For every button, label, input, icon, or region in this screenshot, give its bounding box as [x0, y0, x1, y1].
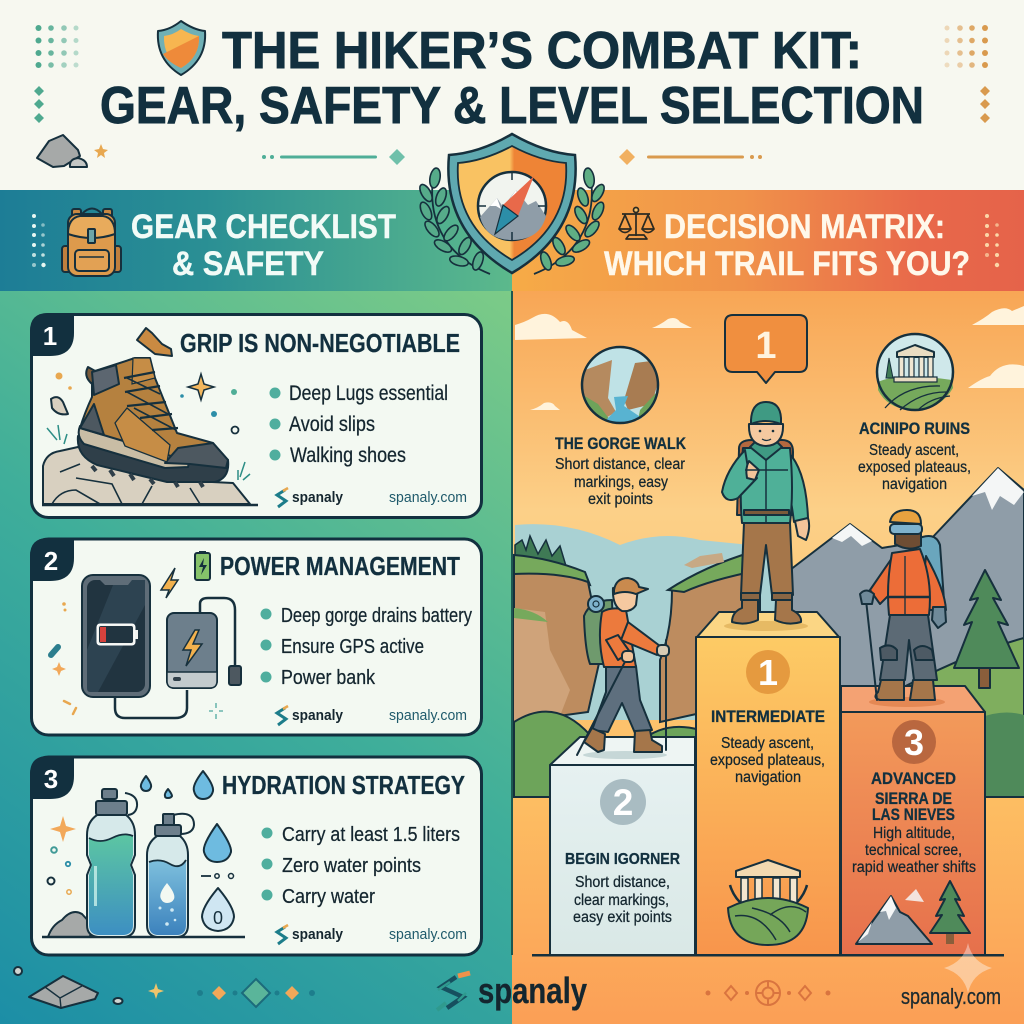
podium block: intermediate: navigation — [735, 769, 801, 786]
text: the gorge walk: THE GORGE WALK — [555, 435, 686, 453]
icon: backpack — [62, 208, 121, 276]
card 2: power — [30, 538, 482, 735]
podium block: intermediate: INTERMEDIATE — [711, 707, 825, 726]
illustration: intermediate hiker — [722, 402, 809, 631]
sparkle — [944, 943, 992, 993]
callout: rank 1 speech bubble — [725, 315, 807, 383]
podium block: intermediate: exposed plateaus, — [710, 752, 825, 769]
illustration: hiking boot on rock — [42, 358, 258, 505]
logo row: card 3 — [277, 925, 467, 944]
badge 3 — [30, 756, 74, 799]
badge 1 — [30, 313, 74, 356]
bullet list: grip — [270, 382, 448, 467]
text: the gorge walk: exit points — [588, 491, 653, 508]
badge 1: 1 — [43, 321, 57, 351]
icon: ruins medallion — [877, 334, 953, 410]
text: acinipo ruins — [858, 420, 971, 493]
bullet list: hydration: Carry at least 1.5 liters — [282, 824, 460, 846]
badge 3: 3 — [44, 764, 58, 794]
title: GEAR, SAFETY & LEVEL SELECTION — [100, 77, 924, 135]
landscape behind the podium — [514, 468, 1024, 797]
podium block: advanced: High altitude, — [873, 825, 955, 842]
podium block: advanced: 3 — [904, 722, 924, 763]
logo row: card 3: spanaly — [292, 926, 344, 943]
header background — [0, 0, 1024, 191]
text: the gorge walk: markings, easy — [574, 474, 668, 491]
text: acinipo ruins: navigation — [882, 476, 947, 493]
banner: decision matrix — [512, 190, 1024, 291]
footer logo: spanaly — [478, 970, 587, 1011]
card 3: hydration: HYDRATION STRATEGY — [222, 770, 465, 800]
podium block: advanced: LAS NIEVES — [872, 805, 955, 824]
emblem: central shield and wreaths — [417, 134, 607, 274]
pine tree — [954, 570, 1019, 688]
logo row: card 3: spanaly.com — [389, 926, 467, 943]
podium block: beginner: Short distance, — [575, 874, 670, 891]
footer left: ornament — [197, 979, 315, 1007]
logo row: card 2: spanaly — [292, 707, 344, 724]
banner: gear checklist — [0, 190, 512, 291]
podium block: beginner: easy exit points — [573, 909, 672, 926]
text: acinipo ruins: Steady ascent, — [869, 442, 959, 459]
icon: title shield — [158, 21, 205, 75]
footer url: spanaly.com — [901, 984, 1001, 1009]
decorative dots: left banner — [32, 214, 46, 267]
text: the gorge walk — [555, 435, 686, 508]
icon: header rock and star — [37, 135, 108, 167]
icon: small shoe — [137, 328, 172, 356]
podium block: advanced: technical scree, — [865, 842, 962, 859]
title: THE HIKER’S COMBAT KIT: — [222, 22, 862, 80]
bullet list: hydration: Zero water points — [282, 855, 421, 877]
bullet list: grip: Deep Lugs essential — [289, 382, 448, 405]
podium block: beginner — [550, 737, 695, 955]
footer left: rock and pebbles — [14, 967, 164, 1008]
text: acinipo ruins: ACINIPO RUINS — [859, 420, 970, 438]
icon: gorge medallion — [582, 347, 658, 424]
divider: right — [619, 149, 762, 165]
card 2: power: POWER MANAGEMENT — [220, 551, 460, 581]
decorative dots: right banner — [985, 214, 999, 267]
banner: gear checklist: & SAFETY — [172, 245, 324, 283]
podium block: beginner: clear markings, — [574, 892, 669, 909]
footer right: ornament — [706, 981, 830, 1005]
banner: decision matrix: WHICH TRAIL FITS YOU? — [604, 245, 970, 283]
podium block: intermediate: 1 — [758, 652, 778, 693]
bullet list: grip: Walking shoes — [290, 444, 406, 467]
bullet list: grip: Avoid slips — [289, 413, 375, 436]
callout: rank 1 speech bubble: 1 — [755, 325, 777, 367]
illustration: water bottles — [42, 776, 245, 937]
icon: title water drop — [194, 771, 213, 799]
illustration: water bottles: 0 — [213, 908, 223, 928]
text: acinipo ruins: exposed plateaus, — [858, 459, 971, 476]
logo row: card 1: spanaly — [292, 489, 344, 506]
icon: scales — [619, 208, 654, 239]
bullet list: hydration — [262, 824, 460, 908]
podium block: beginner: 2 — [613, 782, 633, 823]
podium block: advanced: ADVANCED — [871, 769, 956, 788]
podium block: intermediate: Steady ascent, — [721, 735, 814, 752]
icon: green battery — [195, 551, 210, 580]
decorative dot grid: top left — [34, 25, 78, 123]
banner: gear checklist: GEAR CHECKLIST — [131, 208, 396, 246]
illustration: beginner hiker — [577, 578, 669, 759]
banner: decision matrix: DECISION MATRIX: — [664, 208, 945, 246]
decorative dot grid: top right — [944, 25, 990, 123]
podium base line — [532, 954, 1004, 956]
podium block: advanced — [841, 686, 985, 955]
card 3: hydration — [30, 756, 482, 955]
podium block: intermediate — [696, 612, 840, 955]
icon: mountain and tree — [856, 881, 970, 944]
logo row: card 1 — [277, 488, 467, 507]
badge 2: 2 — [44, 546, 58, 576]
footer logo — [437, 970, 587, 1011]
clouds — [515, 306, 1024, 410]
bullet list: power: Deep gorge drains battery — [281, 605, 472, 627]
podium block: advanced: SIERRA DE — [875, 789, 952, 808]
bullet list: power: Ensure GPS active — [281, 636, 424, 658]
divider: left — [262, 149, 405, 165]
podium block: beginner: BEGIN IGORNER — [565, 851, 680, 868]
text: the gorge walk: Short distance, clear — [555, 456, 685, 473]
bullet list: power — [260, 605, 472, 689]
title — [100, 22, 924, 135]
logo row: card 2 — [277, 706, 467, 725]
illustration: advanced hiker — [860, 510, 946, 707]
badge 2 — [30, 538, 74, 581]
bullet list: power: Power bank — [281, 667, 376, 689]
icon: temple emblem — [728, 860, 808, 945]
card 1: grip: GRIP IS NON-NEGOTIABLE — [180, 328, 460, 358]
panel: right sky background — [512, 291, 1024, 1024]
left edge divider line — [511, 291, 513, 955]
illustration: phone and power bank — [51, 568, 241, 719]
logo row: card 2: spanaly.com — [389, 707, 467, 724]
card 1: grip — [30, 313, 482, 518]
logo row: card 1: spanaly.com — [389, 489, 467, 506]
bullet list: hydration: Carry water — [282, 886, 375, 908]
podium — [532, 612, 1004, 956]
panel: left background — [0, 291, 512, 1024]
podium block: advanced: rapid weather shifts — [852, 859, 976, 876]
